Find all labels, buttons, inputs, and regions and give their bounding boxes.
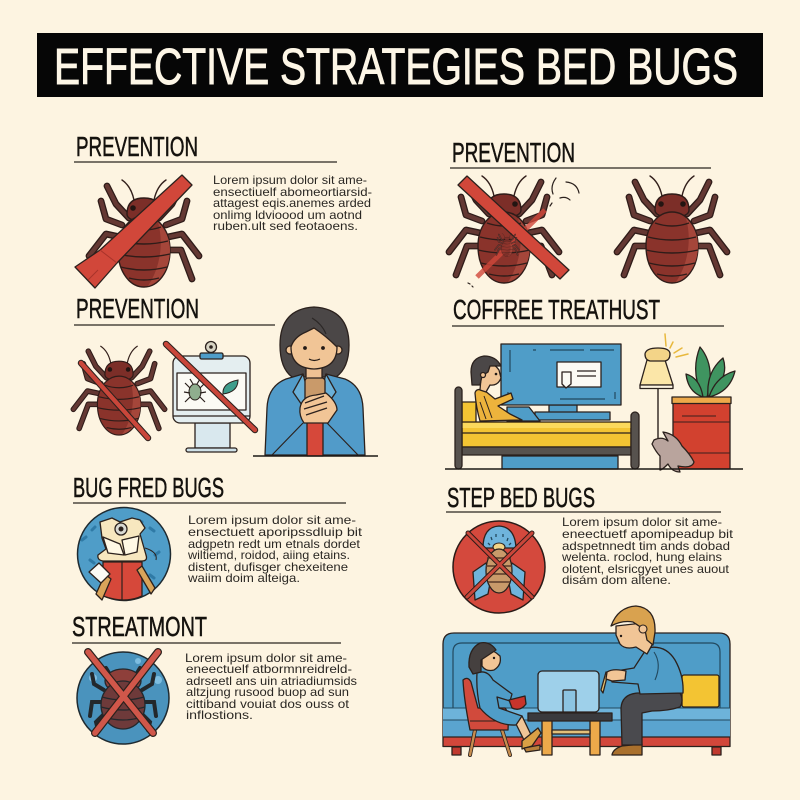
icon: bed [455,387,639,469]
text block: wiltiemd, roidod, aiing etains. [187,548,350,562]
text block: Lorem ipsum dolor sit ame- [185,651,347,665]
text block: eneectuetf apomipeadup bit [562,527,734,541]
icon: person on bed [462,356,540,423]
icon: lamp [640,334,688,440]
text block: altzjung rusood buop ad sun [186,685,349,699]
heading: bug fred bugs: BUG FRED BUGS [73,472,224,503]
heading: step bed bugs: STEP BED BUGS [447,482,595,513]
icon: crossed-out bug with red bar [75,175,199,288]
icon: bed bug [617,176,727,283]
text block: cittiband vouiat dos ouss ot [186,697,350,711]
text block: adspetnnedt tim ands dobad [562,539,730,553]
text block: waiim doim alteiga. [187,571,300,585]
text block: Lorem ipsum dolor sit ame- [188,513,356,527]
icon: person holding phone [253,307,378,456]
icon: sofa [443,633,730,755]
icon: plant in red pot [672,347,735,469]
panel: streatmont [72,611,360,744]
panel: prevention middle left [73,293,378,456]
text block: ensectiuelf abomeortiarsid- [213,185,372,199]
text block: attagest eqis.anemes arded [213,196,371,210]
text block: eneectuelf atbormnreidreld- [186,662,352,676]
text block: Lorem ipsum dolor sit ame- [213,173,367,187]
heading: prevention: PREVENTION [76,131,198,162]
text block: adrseetl ans uin atriadiumsids [186,674,357,688]
text block: disám dom altene. [562,573,671,587]
text block: ruben.ult sed feotaoens. [213,219,358,233]
icon: circle with inspection scene [78,508,170,601]
heading: coffree treathust: COFFREE TREATHUST [453,294,660,325]
text block: Lorem ipsum dolor sit ame- [562,515,722,529]
heading: prevention right: PREVENTION [452,137,575,168]
icon: monitor on bed [501,344,621,420]
text block: onlimg ldvioood um aotnd [213,208,362,222]
icon: laptop on table [528,671,612,755]
icon: circle with crossed-out bug [77,652,169,744]
panel: bug fred bugs [73,472,365,601]
floor line [445,468,743,470]
text block: ensectuett aporipssdluip bit [188,525,363,539]
icon: crossed-out monitor [166,342,255,452]
text block: distent, dufisger chexeitene [188,560,348,574]
icon: small crossed-out bug [73,346,165,438]
text block: welenta. roclod, hung elains [561,550,722,564]
text block: olotent, elsricgyet unes auout [562,562,730,576]
illustration: family on sofa [443,606,730,755]
text block: inflostions. [186,708,253,722]
panel: prevention top left [74,131,375,288]
heading: prevention second: PREVENTION [76,293,199,324]
icon: woman in red chair [463,643,541,755]
icon: crossed-out bug with spray [449,176,579,287]
panel: coffree treathust [445,294,743,472]
text block: adgpetn redt um etnals dordet [188,537,361,551]
icon: clothes pile [652,432,694,472]
icon: man seated [601,606,683,755]
panel: step bed bugs [446,482,736,613]
heading: streatmont: STREATMONT [72,611,207,642]
panel: prevention top right [449,137,727,287]
icon: red circle with crossed-out bug [453,521,545,613]
